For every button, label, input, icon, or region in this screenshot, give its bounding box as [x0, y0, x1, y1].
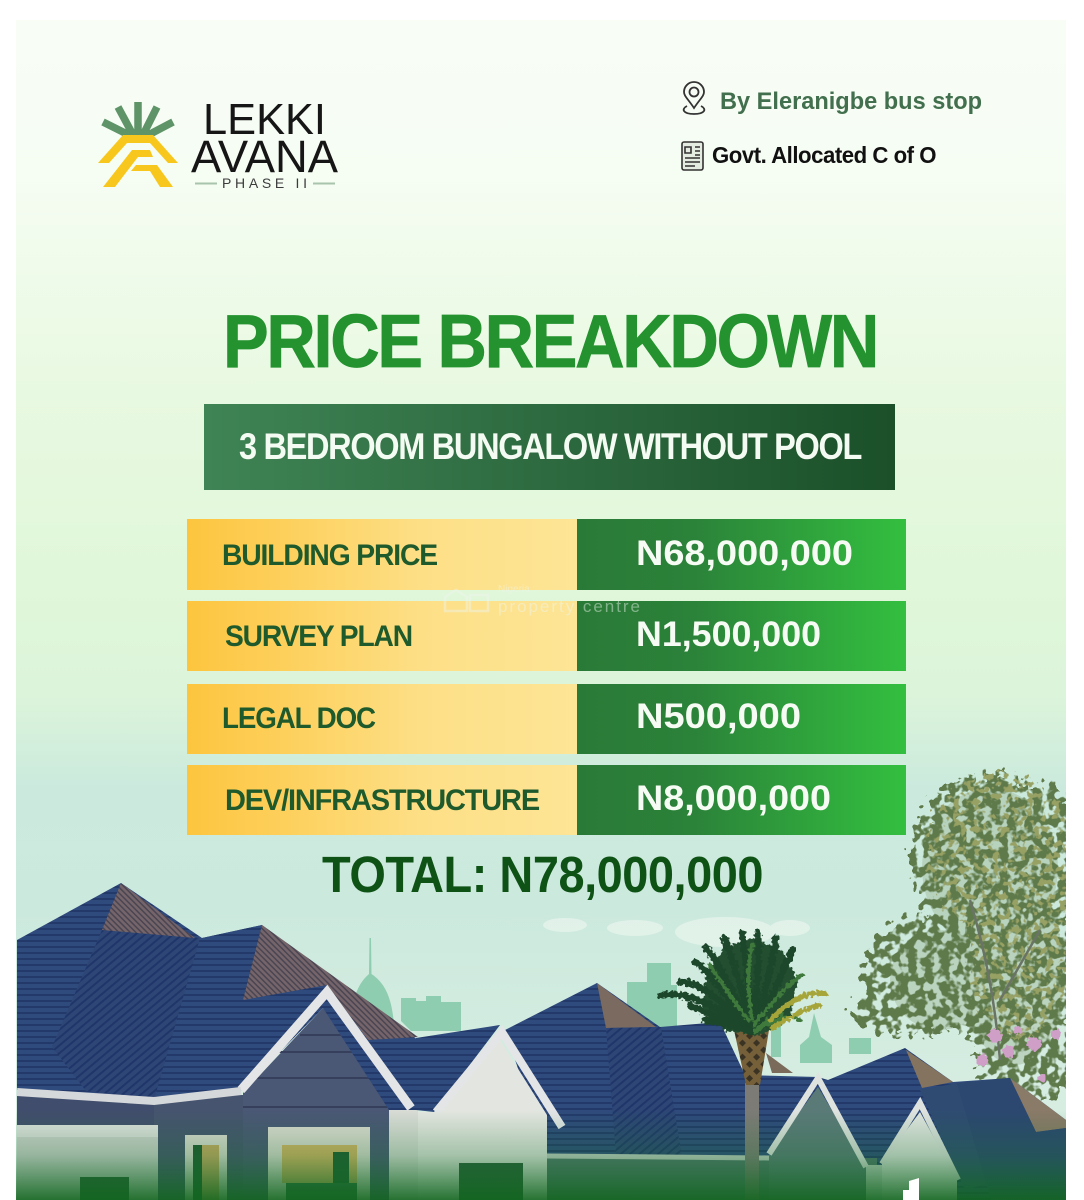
location text: By Eleranigbe bus stop	[720, 88, 982, 115]
logo wordmark LEKKI: LEKKI	[203, 95, 326, 144]
row: dev and infrastructure: DEV/INFRASTRUCTURE	[225, 784, 539, 817]
logo: Lekki Avana Phase II	[98, 95, 338, 191]
bungalow house illustration	[17, 883, 1066, 1200]
tree with pink blossoms	[854, 773, 1082, 1105]
row: building price: BUILDING PRICE	[222, 539, 437, 572]
icon: document	[682, 142, 703, 170]
right roof	[505, 983, 1066, 1200]
watermark: Nigeria	[498, 584, 530, 595]
icon: pineapple logo mark	[98, 102, 178, 187]
document text: Govt. Allocated C of O	[712, 142, 936, 168]
price table	[187, 519, 906, 835]
right walls	[547, 1078, 958, 1200]
logo sub-line PHASE II: PHASE II	[222, 175, 307, 191]
pink blossoms	[976, 1026, 1061, 1082]
logo wordmark AVANA: AVANA	[191, 131, 338, 182]
palm tree	[661, 933, 825, 1200]
row: legal doc	[187, 684, 906, 754]
row: building price	[187, 519, 906, 590]
heading: price breakdown: PRICE BREAKDOWN	[223, 299, 877, 383]
location note	[684, 82, 982, 115]
bottom green fade	[16, 1110, 1066, 1200]
banner: house type: 3 BEDROOM BUNGALOW WITHOUT POOL	[239, 426, 862, 467]
watermark: property centre	[498, 597, 640, 616]
white gable trims	[17, 992, 562, 1127]
icon: map pin	[684, 82, 704, 114]
left roof	[17, 883, 500, 1112]
distant skyline	[354, 938, 871, 1063]
left walls	[17, 1008, 547, 1200]
small white shape at bottom edge	[903, 1178, 919, 1200]
row: legal doc: N500,000	[636, 697, 801, 736]
clouds	[543, 917, 810, 947]
row: dev and infrastructure: N8,000,000	[636, 779, 831, 818]
banner: house type	[204, 404, 895, 490]
title document note	[682, 142, 936, 170]
row: survey plan: N1,500,000	[636, 615, 821, 654]
row: survey plan	[187, 601, 906, 671]
row: dev and infrastructure	[187, 765, 906, 835]
row: legal doc: LEGAL DOC	[222, 702, 375, 735]
row: survey plan: SURVEY PLAN	[225, 620, 412, 653]
total price: TOTAL: N78,000,000	[322, 846, 763, 903]
watermark	[445, 584, 640, 616]
row: building price: N68,000,000	[636, 534, 853, 573]
